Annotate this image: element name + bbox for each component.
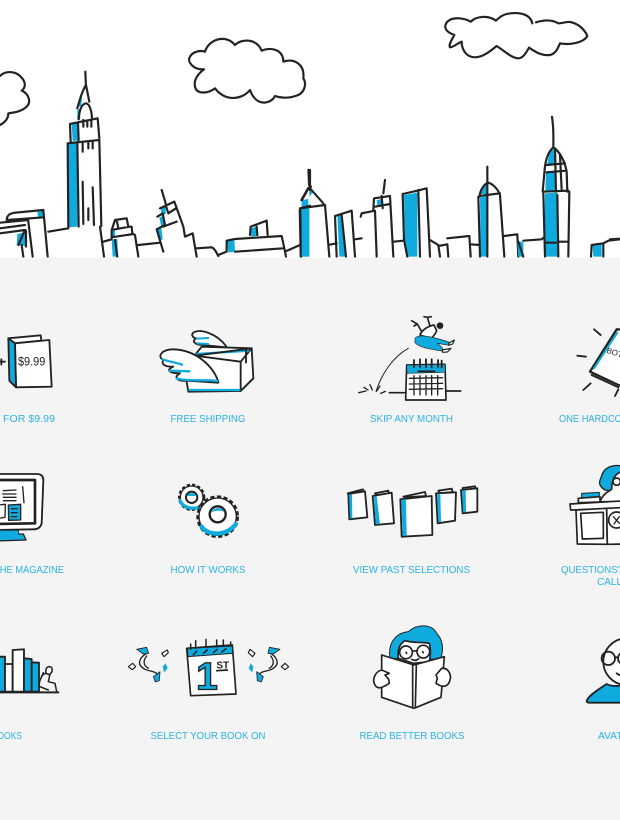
building: pointed tower bbox=[300, 170, 311, 257]
large gear bbox=[199, 498, 237, 536]
label: view past selections: VIEW PAST SELECTIONS bbox=[353, 565, 470, 576]
cloud: centre bbox=[189, 39, 305, 103]
building: empire state tower bbox=[68, 72, 101, 227]
hands bbox=[374, 670, 389, 688]
building: domed tower bbox=[478, 167, 518, 257]
date text: 1 bbox=[196, 655, 218, 699]
building: narrow towers bbox=[335, 180, 403, 257]
cloud: top right bbox=[445, 13, 587, 58]
icon: monitor with magazine bbox=[0, 474, 43, 541]
book 2 bbox=[373, 491, 394, 525]
building: left cluster bbox=[0, 210, 48, 257]
icon: gears bbox=[180, 486, 237, 536]
icon: receptionist at desk bbox=[570, 466, 620, 544]
icon: person jumping over calendar bbox=[359, 317, 461, 400]
icon: hardcover book with rays bbox=[577, 329, 620, 396]
glasses bbox=[400, 645, 430, 660]
icon: bookshelf with sitting figure bbox=[0, 649, 58, 692]
icon: winged box bbox=[160, 331, 253, 392]
label: select your book on: SELECT YOUR BOOK ON bbox=[150, 731, 266, 742]
hair and face bbox=[600, 466, 620, 502]
icon: row of past books bbox=[348, 486, 477, 537]
icon: calendar showing the 1st with ribbons bbox=[128, 639, 289, 699]
building: chrysler tower bbox=[517, 117, 569, 257]
panel: grey features background bbox=[0, 258, 620, 820]
date suffix: ST bbox=[216, 660, 229, 671]
price text: $9.99 bbox=[18, 355, 46, 369]
icon: book priced $9.99 bbox=[0, 335, 52, 387]
building: pointed tower right side bbox=[300, 170, 337, 257]
label: read better books: READ BETTER BOOKS bbox=[360, 731, 465, 742]
ribbon right bbox=[248, 647, 289, 682]
building: tall blue block bbox=[403, 188, 480, 257]
skyline: right half with cloud bbox=[300, 13, 620, 257]
label: free shipping: FREE SHIPPING bbox=[170, 414, 246, 425]
building: right edge bbox=[591, 239, 620, 257]
building: base and mid towers bbox=[48, 190, 300, 257]
icon: avatar with glasses bbox=[587, 638, 620, 703]
sitting figure bbox=[39, 667, 57, 692]
book 5 bbox=[461, 486, 477, 513]
icon: person reading a book bbox=[374, 626, 450, 708]
label: skip any month: SKIP ANY MONTH bbox=[370, 414, 453, 425]
cloud: left edge bbox=[0, 72, 29, 125]
book 1 bbox=[348, 489, 367, 519]
jumper figure bbox=[412, 317, 454, 352]
label: for $9.99: FOR $9.99 bbox=[3, 414, 55, 425]
small gear bbox=[180, 486, 203, 509]
skyline: left half with clouds bbox=[0, 39, 311, 257]
book 3 bbox=[400, 492, 432, 537]
label: how it works: HOW IT WORKS bbox=[170, 565, 246, 576]
book 4 bbox=[436, 489, 456, 523]
ribbon left bbox=[128, 647, 168, 682]
